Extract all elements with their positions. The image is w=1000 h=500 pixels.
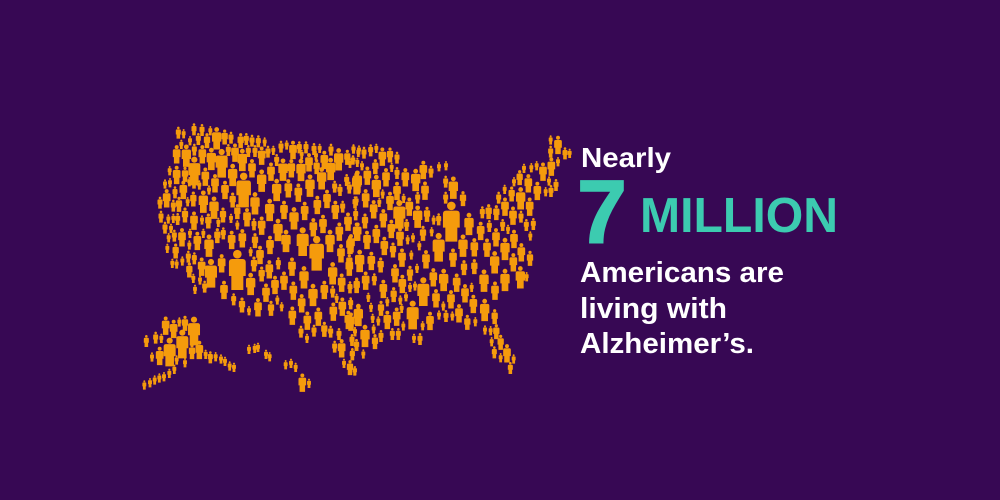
- people: Hawaii: [247, 343, 311, 392]
- people: southwest states: [170, 250, 363, 375]
- people: northwest states: [157, 123, 361, 271]
- text: living with: living with: [580, 293, 727, 325]
- text: Nearly: Nearly: [581, 142, 671, 173]
- people: Alaska: [142, 316, 236, 390]
- text: MILLION: MILLION: [640, 189, 838, 243]
- statistic text block: [577, 142, 838, 360]
- text: Alzheimer's.: Alzheimer’s.: [580, 328, 754, 360]
- text: Americans are: Americans are: [580, 257, 784, 289]
- people: southern states and Florida: [347, 264, 529, 376]
- map of the US made of people: [142, 123, 572, 392]
- number: 7: 7: [577, 163, 627, 263]
- people: midwest and northeast states: [347, 135, 572, 275]
